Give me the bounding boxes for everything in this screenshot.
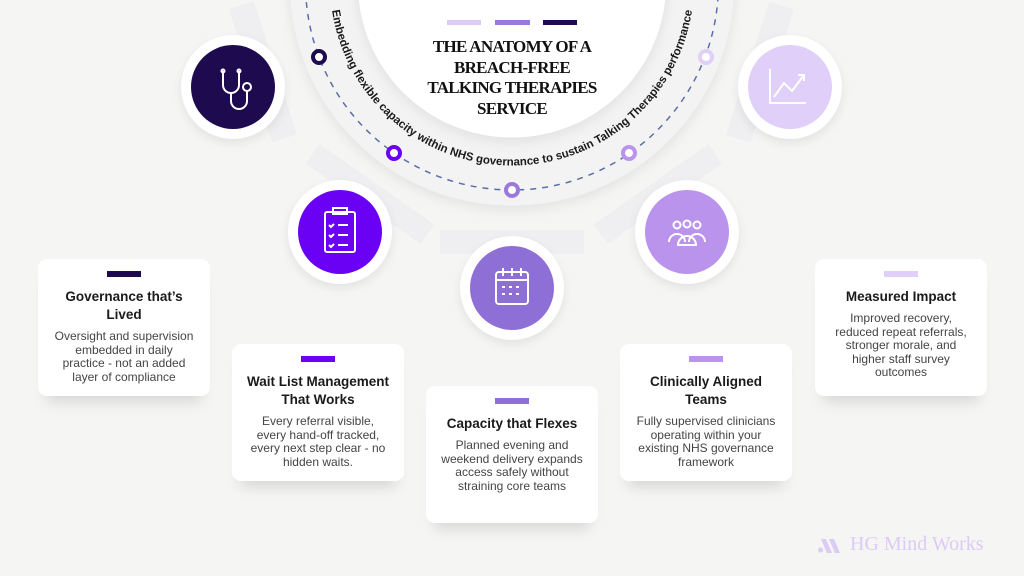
title: TALKING THERAPIES (427, 78, 597, 97)
card: measured impact (815, 259, 987, 396)
card: clinically aligned: Clinically Aligned Teams (650, 374, 762, 407)
curved subtitle (330, 0, 694, 166)
card: clinically aligned (620, 344, 792, 481)
title: BREACH-FREE (454, 58, 570, 76)
card: governance: Governance that’s Lived (65, 289, 183, 322)
card: governance: Oversight and supervision embedded in daily practice - not an added layer of compliance (55, 329, 193, 384)
inner white circle (358, 0, 666, 138)
card: governance (38, 259, 210, 396)
outer ring (290, 0, 734, 206)
card: wait list: Wait List Management That Works (247, 374, 389, 407)
card: capacity: Capacity that Flexes (447, 416, 577, 431)
dashed arc (306, 0, 718, 190)
icon: chart (738, 35, 842, 139)
card: wait list (232, 344, 404, 481)
logo: HG Mind Works (850, 533, 984, 555)
icon: people (635, 180, 739, 284)
icon: calendar (460, 236, 564, 340)
title bars (447, 20, 577, 25)
card: wait list: Every referral visible, every hand-off tracked, every next step clear - no hidden waits. (251, 414, 385, 468)
dots on arc (313, 51, 712, 196)
card: capacity (426, 386, 598, 523)
title (427, 37, 597, 118)
title: SERVICE (477, 98, 547, 118)
background diagram: Embedding flexible capacity within NHS governance to sustain Talking Therapies performance (332, 10, 692, 166)
decorative spokes (229, 1, 794, 254)
icon: stethoscope (181, 35, 285, 139)
card: measured impact: Measured Impact (846, 289, 956, 304)
card: clinically aligned: Fully supervised clinicians operating within your existing NHS governance framework (637, 414, 775, 468)
icon: clipboard (288, 180, 392, 284)
title: THE ANATOMY OF A (433, 37, 591, 56)
card: capacity: Planned evening and weekend delivery expands access safely without straining core teams (441, 438, 583, 492)
card: measured impact: Improved recovery, reduced repeat referrals, stronger morale, and higher staff survey outcomes (835, 311, 967, 379)
